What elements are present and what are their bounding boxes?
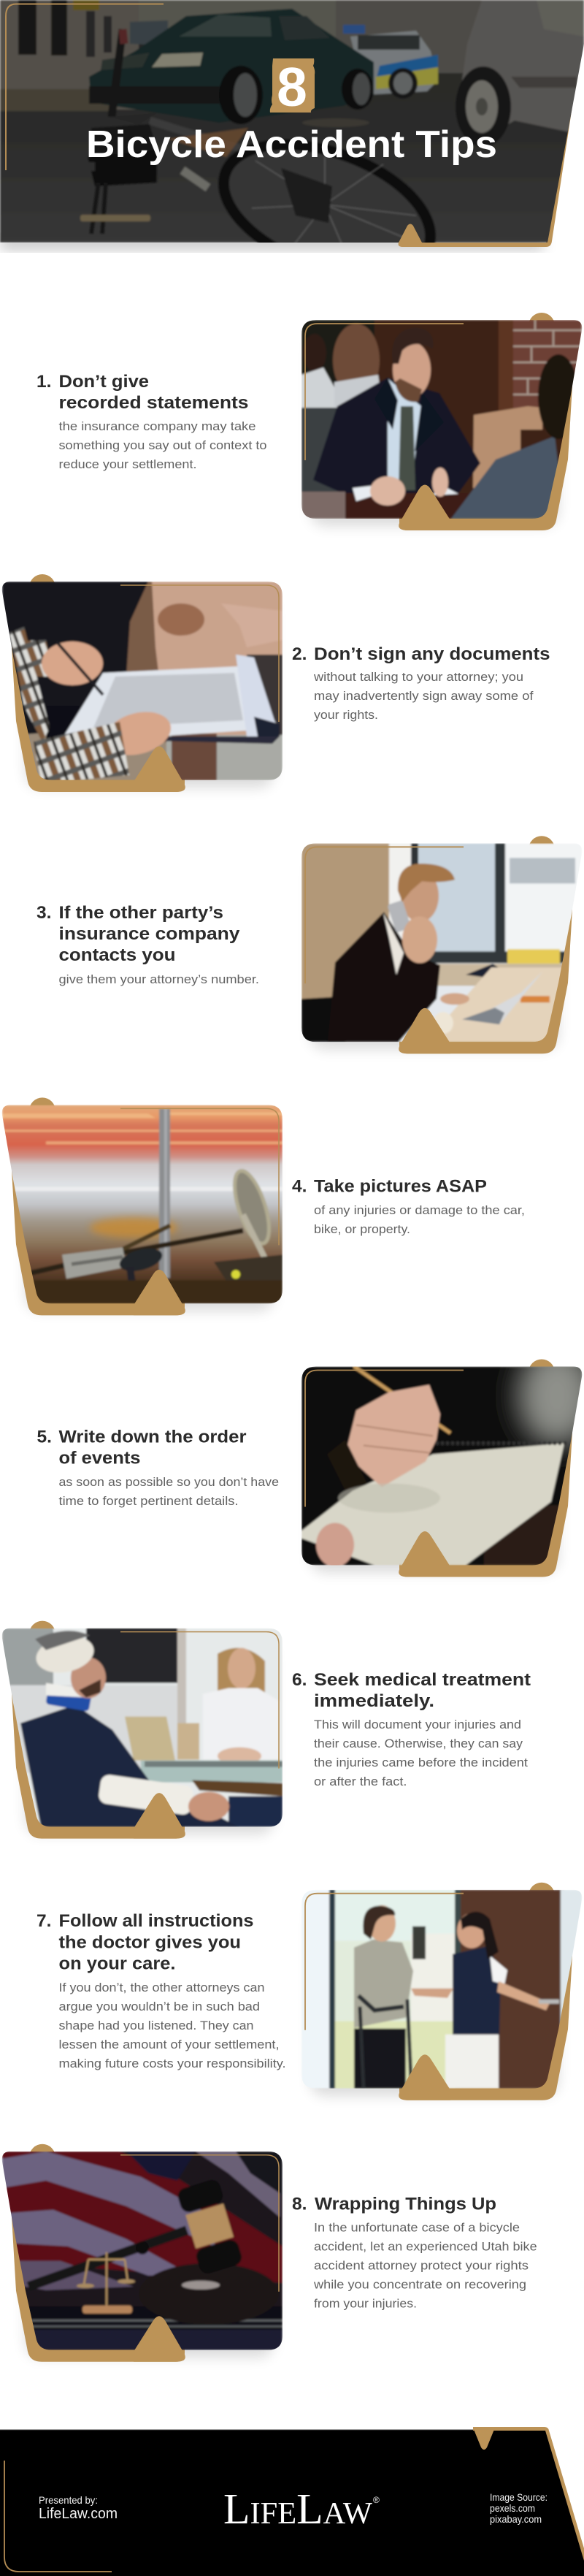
gold triangle accent: [399, 224, 422, 247]
tip 5 heading: [36, 1428, 247, 1468]
photo: patient on crutches shaking nurse's hand: [301, 1890, 582, 2089]
tip 5 image card: [301, 1344, 584, 1577]
tip 6 body: their cause. Otherwise, they can say: [314, 1737, 523, 1750]
gold triangle pointer: [473, 2428, 495, 2450]
gold triangle: [134, 747, 185, 792]
tip 1 body: the insurance company may take: [58, 420, 256, 433]
tip 2 image card: [2, 574, 283, 792]
tip 7 heading: [36, 1911, 254, 1974]
tip 7 heading: 7.: [36, 1911, 51, 1931]
tip 6 heading: [292, 1670, 531, 1711]
thin gold line: [305, 847, 464, 983]
tip 6 text: [292, 1670, 531, 1788]
tip 7 heading: on your care.: [58, 1954, 175, 1974]
tip 5 heading: Write down the order: [58, 1428, 247, 1447]
thin gold line: [305, 1894, 464, 2030]
footer black shape: [0, 2430, 584, 2576]
tip 8 image card: [2, 2144, 283, 2362]
tip 8 text: [292, 2195, 537, 2310]
thin gold line: [120, 1108, 279, 1245]
tip 4 body: bike, or property.: [314, 1223, 410, 1236]
tip 4 text: [292, 1176, 525, 1236]
tip 2 body: [313, 671, 534, 722]
tip 8 heading: Wrapping Things Up: [315, 2195, 496, 2214]
tip 7 image card: [301, 1883, 582, 2100]
tip 8 body: from your injuries.: [314, 2297, 417, 2310]
tip 1 text: [36, 372, 267, 471]
shadow: [310, 1381, 558, 1572]
tip 4 heading: 4.: [292, 1176, 307, 1197]
shadow: [310, 858, 558, 1049]
image source: Image Source:: [490, 2491, 548, 2503]
header photo: bicycle and cars at accident scene: [0, 0, 584, 243]
shadow: [26, 1643, 274, 1834]
tip 2 heading: Don’t sign any documents: [314, 644, 550, 664]
tip 4 body: of any injuries or damage to the car,: [314, 1204, 525, 1217]
tip 5 body: as soon as possible so you don’t have: [58, 1476, 279, 1489]
gold frame of header: [399, 29, 584, 247]
shadow: [26, 1119, 274, 1311]
presented by: Presented by:: [39, 2494, 98, 2506]
tip 5 body: [58, 1476, 279, 1508]
tip 3 heading: 3.: [36, 903, 51, 923]
tip 3 heading: If the other party’s: [58, 903, 223, 923]
tip 3 heading: insurance company: [58, 924, 240, 944]
tip 6 heading: immediately.: [314, 1691, 434, 1711]
thin gold line: [305, 1371, 464, 1506]
gold triangle: [134, 1793, 185, 1839]
gold frame: [399, 836, 572, 1053]
tip 7 heading: Follow all instructions: [58, 1911, 254, 1931]
thin gold corner line: [6, 4, 164, 170]
tip 4 heading: Take pictures ASAP: [314, 1176, 487, 1197]
thin gold line: [120, 585, 279, 722]
image source: [490, 2491, 548, 2525]
photo: man on phone at laptop: [301, 843, 582, 1042]
gold triangle: [399, 2054, 450, 2100]
tip 4 image card: [2, 1097, 283, 1315]
LifeLaw logo: LIFELAW: [223, 2485, 372, 2533]
shadow: [310, 1905, 558, 2096]
gold frame: [12, 574, 185, 792]
tip 1 heading: 1.: [36, 372, 51, 392]
title: Bicycle Accident Tips: [86, 123, 497, 166]
tip 6 heading: 6.: [292, 1670, 307, 1690]
shadow: [26, 2166, 274, 2358]
tip 8 body: accident attorney protect your rights: [314, 2259, 529, 2272]
tip 7 body: making future costs your responsibility.: [58, 2057, 286, 2070]
gold triangle: [134, 2316, 185, 2362]
tip 7 body: If you don’t, the other attorneys can: [58, 1981, 264, 1994]
tip 3 heading: [36, 903, 240, 965]
photo: lawyer at table: [301, 320, 582, 519]
tip 7 body: shape had you listened. They can: [58, 2019, 254, 2032]
photo: hand writing in notebook: [301, 1366, 583, 1565]
tip 8 body: accident, let an experienced Utah bike: [314, 2240, 537, 2253]
tip 6 body: [314, 1718, 528, 1788]
tip 7 text: [36, 1911, 286, 2070]
tip 6 body: or after the fact.: [314, 1775, 407, 1788]
tip 8 body: [313, 2221, 537, 2310]
tip 7 body: argue you wouldn’t be in such bad: [58, 2000, 260, 2013]
photo: injured patient with doctor: [2, 1628, 283, 1827]
tip 2 text: [292, 644, 550, 722]
gold frame: [12, 1097, 185, 1315]
photo: signing documents: [2, 582, 283, 780]
tip 1 heading: recorded statements: [58, 393, 248, 413]
tip 6 heading: Seek medical treatment: [314, 1670, 531, 1690]
header banner: [0, 0, 584, 253]
tip 6 image card: [2, 1621, 283, 1839]
gold frame: [399, 1359, 572, 1577]
bike: [112, 29, 123, 117]
tip 2 body: without talking to your attorney; you: [313, 671, 523, 684]
gold triangle: [399, 485, 450, 530]
police car: [350, 31, 438, 95]
thin gold line: [305, 324, 464, 460]
manhole: [302, 118, 369, 127]
footer top edge: [0, 2430, 474, 2431]
shadow: [310, 335, 558, 526]
tip 2 heading: 2.: [292, 644, 307, 664]
tip 8 body: while you concentrate on recovering: [313, 2278, 526, 2291]
tip 2 body: your rights.: [314, 709, 378, 722]
tip 8 body: In the unfortunate case of a bicycle: [314, 2221, 520, 2234]
tip 3 body: give them your attorney’s number.: [58, 973, 259, 986]
tip 1 body: something you say out of context to: [58, 439, 267, 452]
image source: pixabay.com: [490, 2513, 542, 2525]
footer gold edge: [473, 2427, 584, 2561]
gold triangle: [399, 1531, 450, 1577]
tip 5 heading: of events: [58, 1448, 140, 1468]
tip 5 heading: 5.: [36, 1428, 52, 1447]
gold frame: [12, 1621, 185, 1839]
badge: number 8: [270, 56, 315, 118]
tip 1 heading: Don’t give: [58, 372, 149, 392]
gold triangle: [134, 1270, 185, 1315]
silver car: [460, 0, 584, 139]
tip 3 image card: [301, 836, 582, 1053]
tip 1 body: reduce your settlement.: [58, 458, 197, 471]
presented by: [39, 2494, 118, 2522]
gold frame: [399, 313, 572, 530]
gold frame: [12, 2144, 185, 2362]
thin gold corner line: [4, 2461, 112, 2572]
tip 1 body: [58, 420, 267, 471]
tip 1 heading: [36, 372, 248, 413]
tip 6 body: This will document your injuries and: [314, 1718, 521, 1731]
tip 6 body: the injuries came before the incident: [314, 1756, 528, 1769]
tip 7 body: lessen the amount of your settlement,: [58, 2038, 279, 2051]
thin gold line: [120, 1632, 279, 1769]
tip 3 text: [36, 903, 259, 986]
gold triangle: [399, 1008, 450, 1053]
shadow: [26, 596, 274, 788]
thin gold line: [120, 2155, 279, 2292]
green car: [89, 9, 374, 123]
tip 4 body: [314, 1204, 525, 1236]
tip 3 heading: contacts you: [58, 945, 175, 965]
badge: number 8: 8: [277, 56, 307, 118]
presented by: LifeLaw.com: [39, 2506, 118, 2522]
gold frame: [399, 1883, 572, 2100]
tip 2 body: may inadvertently sign away some of: [314, 690, 534, 703]
tip 7 body: [58, 1981, 286, 2070]
tip 5 text: [36, 1428, 279, 1508]
LifeLaw logo: ®: [373, 2495, 380, 2505]
header shadow: [0, 235, 544, 250]
tip 1 image card: [301, 313, 582, 530]
tip 8 heading: 8.: [292, 2195, 307, 2214]
photo: gavel, scales and flag: [2, 2152, 283, 2350]
photo: fallen bicycle with motion lights: [2, 1105, 283, 1303]
footer band: [0, 2427, 584, 2576]
tip 7 heading: the doctor gives you: [58, 1933, 241, 1952]
image source: pexels.com: [490, 2502, 535, 2514]
tip 5 body: time to forget pertinent details.: [58, 1495, 238, 1508]
